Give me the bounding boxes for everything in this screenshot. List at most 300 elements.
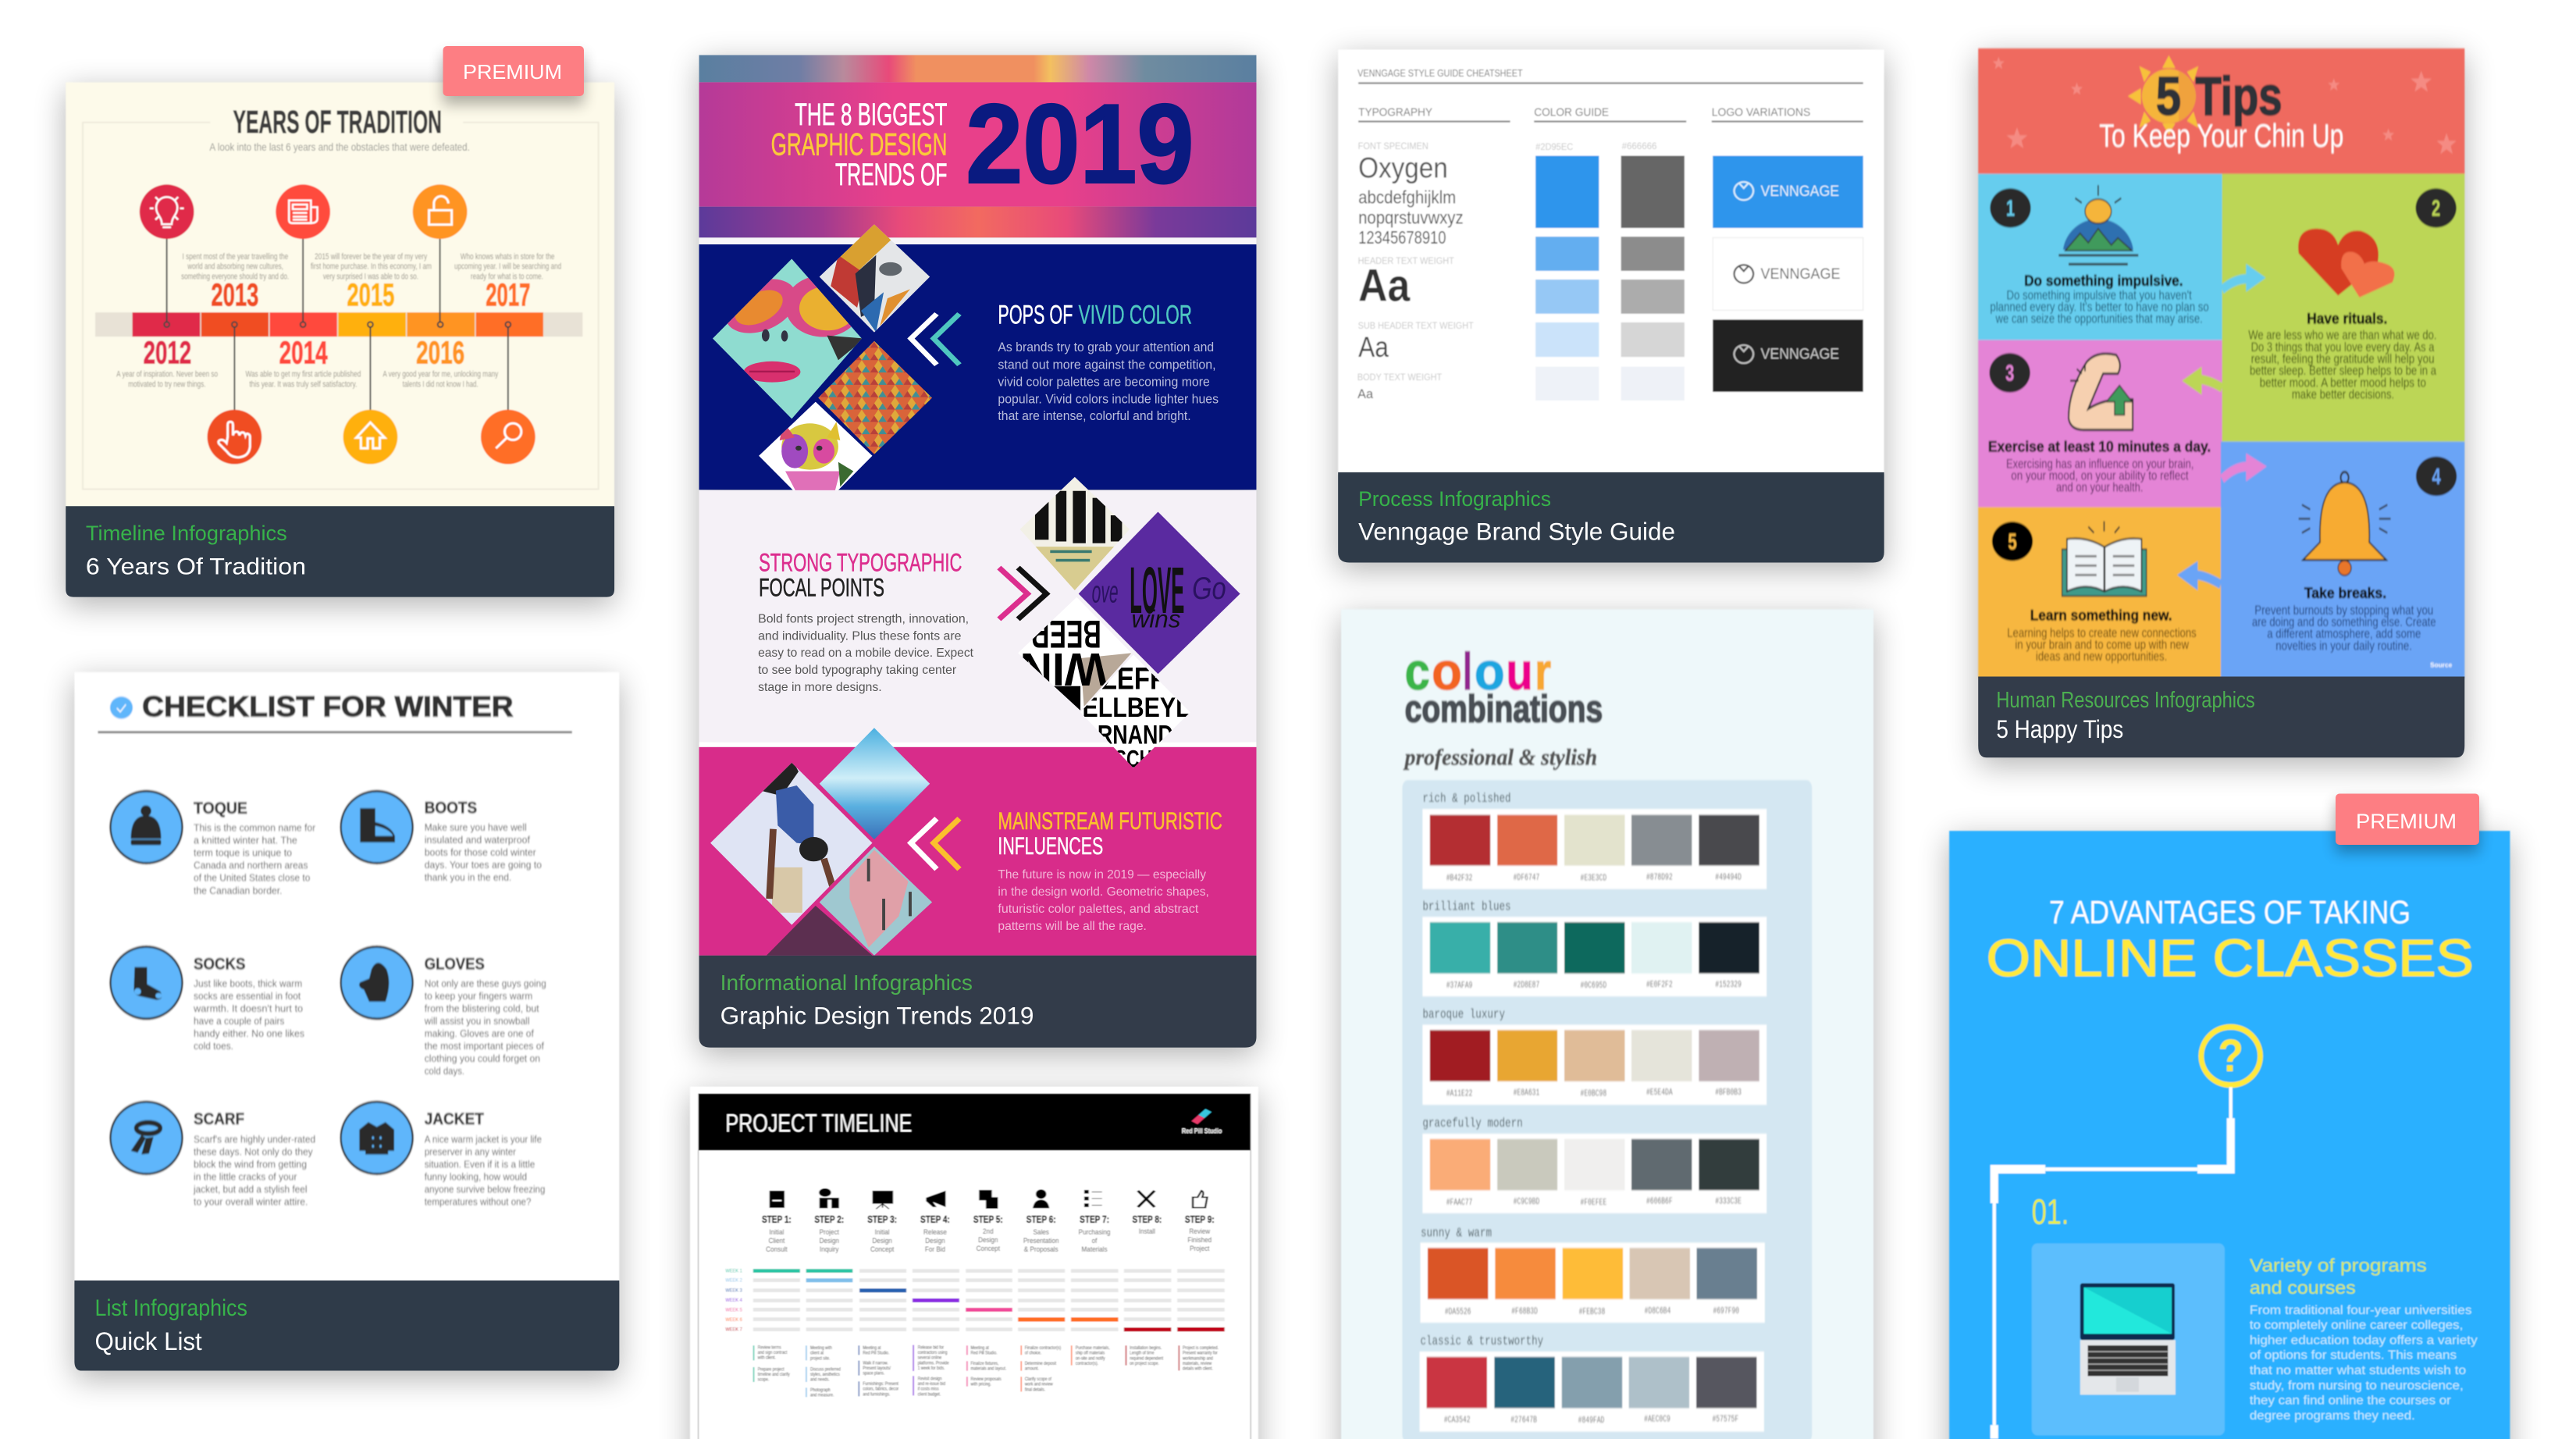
panel: project timeline card — [690, 1087, 1258, 1439]
step notes: materials and layout. — [971, 1366, 1007, 1372]
step notes: Revisit design — [918, 1377, 942, 1381]
item: jacket: A nice warm jacket is your life — [425, 1133, 542, 1145]
heading: combinations: combinations — [1405, 687, 1603, 730]
typography column: Aa — [1358, 260, 1411, 311]
palette: brilliant blues: #152329 — [1715, 980, 1742, 989]
photo: love wins lettering: Go — [1192, 571, 1226, 606]
week labels — [725, 1267, 742, 1332]
logo: dark: VENNGAGE — [1761, 346, 1839, 362]
icon: jacket — [341, 1102, 413, 1174]
subheading: To Keep Your Chin Up — [2099, 117, 2343, 154]
step notes: Project is completed. — [1183, 1346, 1219, 1351]
photo: love wins lettering: ove — [1092, 574, 1119, 609]
heading: Tips — [2195, 66, 2282, 126]
tip 5 text: in your brain and to come up with new — [2015, 637, 2190, 652]
heading: colour: r — [1535, 643, 1551, 701]
panel: Quick List checklist card — [74, 672, 619, 1371]
section body: stage in more designs. — [758, 680, 882, 694]
section body: that no matter what students wish to — [2250, 1363, 2466, 1377]
palette: classic & trustworthy: #CA3542 — [1444, 1415, 1471, 1425]
step descriptions: Design — [978, 1235, 998, 1244]
tip 3 text — [1988, 438, 2211, 494]
photo: black and white lettering: SCH — [1115, 745, 1152, 772]
logo: blue — [1713, 156, 1863, 228]
icon: question mark: ? — [2218, 1030, 2243, 1081]
step descriptions: Materials — [1082, 1245, 1108, 1253]
icon: scarf — [110, 1102, 183, 1174]
step notes: and furnishings. — [863, 1392, 891, 1397]
step notes: work and review — [1024, 1382, 1053, 1387]
step notes: client at — [810, 1351, 824, 1356]
photo: flipped lettering: WIN — [1020, 643, 1107, 694]
step descriptions: Design — [820, 1236, 839, 1245]
timeline captions: upcoming year. I will be searching and — [454, 262, 561, 271]
colour swatches — [1535, 141, 1685, 401]
badge: premium (timeline card): PREMIUM — [463, 60, 562, 84]
palette: brilliant blues: #37AFA9 — [1446, 981, 1472, 991]
typography column: FONT SPECIMEN — [1358, 141, 1429, 151]
tip 1 text: we can seize the opportunities that may arise. — [1995, 311, 2203, 326]
item: gloves: the most important pieces of — [425, 1040, 545, 1052]
item: socks: warmth. It doesn't hurt to — [193, 1003, 304, 1014]
step notes: and needs. — [810, 1377, 830, 1383]
typography column: abcdefghijklm — [1358, 187, 1456, 208]
step notes: project site. — [810, 1356, 831, 1361]
arrow: three to four — [2222, 454, 2267, 482]
subtitle: A look into the last 6 years and the obstacles that were defeated. — [209, 141, 470, 153]
palette: gracefully modern: #F0EFEE — [1581, 1198, 1606, 1207]
section heading — [759, 550, 962, 602]
section heading: POPS OF — [998, 301, 1073, 330]
step notes: and re-issue bid — [918, 1382, 945, 1387]
palette: classic & trustworthy: #AEC0C9 — [1644, 1414, 1670, 1424]
step descriptions: Concept — [977, 1244, 1000, 1252]
caption bar — [1338, 472, 1884, 562]
timeline captions: first home purchase. In this economy, I am — [311, 262, 432, 271]
palette: baroque luxury: #E8A631 — [1514, 1088, 1539, 1098]
section title: Variety of programs — [2250, 1256, 2427, 1276]
step notes: and sign contract — [758, 1351, 788, 1355]
caption bar: Informational Infographics — [720, 971, 973, 996]
item: jacket: anyone survive below freezing — [425, 1183, 545, 1195]
heading: colour — [1405, 643, 1551, 701]
thumbnail: five tips — [1978, 48, 2464, 678]
palette: gracefully modern: #333C3E — [1715, 1196, 1742, 1206]
heading text: THE 8 BIGGEST — [795, 98, 947, 132]
icon: flexed arm — [2069, 354, 2133, 430]
arrow: two to three — [2182, 367, 2222, 395]
week labels: WEEK 3 — [725, 1287, 742, 1293]
tip 2 text: better mood. A better mood helps to — [2260, 375, 2426, 390]
photo: pink and teal walls — [817, 845, 934, 956]
section heading: FOCAL POINTS — [759, 575, 884, 602]
icon: sock — [110, 946, 183, 1019]
step descriptions: For Bid — [925, 1245, 945, 1253]
step notes: Meeting with — [810, 1346, 832, 1351]
step headings: STEP 4: — [920, 1213, 950, 1225]
step notes: scope. — [758, 1377, 770, 1383]
step notes: Furnishings: Present — [863, 1382, 898, 1387]
item: boots: thank you in the end. — [425, 871, 511, 883]
palette: baroque luxury: #E5E4DA — [1646, 1088, 1673, 1098]
item: socks: cold toes. — [194, 1040, 233, 1052]
typography column: nopqrstuvwxyz — [1358, 208, 1464, 228]
step notes: platforms. Provide — [918, 1361, 949, 1366]
item: gloves: Not only are these guys going — [425, 978, 546, 989]
timeline captions: A very good year for me, unlocking many — [382, 370, 499, 379]
step notes: Review terms — [758, 1345, 781, 1350]
item: scarf — [193, 1110, 315, 1208]
step notes: with pricing. — [970, 1382, 991, 1387]
icon: hearts — [2298, 229, 2394, 297]
item: scarf: to your overall winter attire. — [194, 1195, 308, 1208]
chevrons — [911, 818, 959, 869]
thumbnail: style guide cheatsheet — [1338, 49, 1884, 475]
tip 2 text: We are less who we are than what we do. — [2248, 327, 2437, 342]
photo: letter JILL poster — [1019, 477, 1130, 590]
timeline captions: I spent most of the year travelling the — [183, 252, 288, 262]
caption bar: 6 Years Of Tradition — [86, 554, 306, 580]
logo: white: VENNGAGE — [1761, 266, 1840, 283]
palette: rich & polished: #49494D — [1715, 872, 1742, 882]
tip 2 text: Do 3 things that you love every day. As a — [2251, 340, 2435, 354]
icon: toque — [110, 791, 183, 864]
icon: check badge — [110, 696, 133, 719]
photo: triangle pattern — [818, 341, 932, 454]
item: toque: TOQUE — [194, 800, 247, 818]
section body — [758, 611, 973, 694]
number badges: 4 — [2432, 465, 2441, 490]
icon: question mark — [2201, 1027, 2261, 1085]
item: scarf: Scarf's are highly under-rated — [194, 1133, 315, 1145]
item: scarf: SCARF — [194, 1110, 244, 1129]
step notes: on-site and notify — [1076, 1356, 1105, 1361]
step headings: STEP 8: — [1132, 1213, 1162, 1225]
column headers: COLOR GUIDE — [1534, 107, 1609, 119]
caption bar: Graphic Design Trends 2019 — [720, 1002, 1034, 1029]
photo: black and white lettering: RNAND — [1098, 720, 1173, 750]
step descriptions: Design — [925, 1236, 945, 1245]
step notes: timeline and clarify — [758, 1373, 790, 1377]
typography column: 12345678910 — [1358, 228, 1446, 248]
section heading: MAINSTREAM FUTURISTIC — [998, 807, 1222, 834]
heading: years of tradition: YEARS OF TRADITION — [233, 104, 442, 140]
icon: light bulb — [140, 184, 194, 239]
step notes: space plans. — [863, 1371, 885, 1377]
tip 2 text: make better decisions. — [2292, 386, 2394, 401]
step notes: with client. — [757, 1355, 776, 1361]
step notes: if costs miss — [918, 1387, 939, 1392]
number badges: 3 — [2005, 361, 2014, 386]
item: scarf: jacket, but add a stylish feel — [193, 1183, 307, 1195]
section body: futuristic color palettes, and abstract — [998, 902, 1199, 916]
photo: black and white lettering: ZEFF — [1101, 661, 1165, 696]
item: boots: boots for those cold winter — [425, 846, 536, 858]
tip 5 text: ideas and new opportunities. — [2036, 649, 2167, 664]
palette: baroque luxury: #A11E22 — [1446, 1088, 1472, 1099]
section body: to completely online career colleges, — [2250, 1318, 2463, 1332]
badge: premium (online classes card): PREMIUM — [2356, 810, 2457, 833]
timeline captions: A year of inspiration. Never been so — [116, 370, 218, 379]
item: toque: Canada and northern areas — [194, 860, 308, 871]
item: toque: the Canadian border. — [194, 885, 282, 896]
panel: 5 Happy Tips card — [1978, 48, 2464, 757]
years: 2013 — [211, 276, 258, 312]
step notes: Purchase materials, — [1076, 1346, 1110, 1351]
tip 2 text: Have rituals. — [2307, 310, 2387, 327]
week labels: WEEK 1 — [725, 1267, 742, 1273]
number badges — [1990, 188, 2457, 561]
item: socks — [193, 955, 304, 1052]
palette: brilliant blues — [1422, 900, 1767, 996]
item: gloves: GLOVES — [425, 955, 485, 974]
item: gloves: making. Gloves are one of — [425, 1028, 535, 1039]
typography column: BODY TEXT WEIGHT — [1357, 372, 1443, 383]
section heading — [998, 807, 1222, 860]
section body: higher education today offers a variety — [2250, 1334, 2478, 1348]
icon: boot — [341, 791, 413, 864]
icon: sun over mountains — [2058, 185, 2138, 264]
palette: gracefully modern: #C9C9BD — [1514, 1197, 1539, 1207]
palette: gracefully modern: #FAAC77 — [1446, 1198, 1472, 1207]
years: 2016 — [416, 335, 464, 371]
typography column: SUB HEADER TEXT WEIGHT — [1358, 320, 1474, 331]
heading: colour: o — [1475, 643, 1505, 701]
step notes: client budget. — [918, 1392, 941, 1397]
thumbnail: years of tradition timeline — [66, 82, 614, 508]
palette: sunny & warm: #FEBC38 — [1579, 1307, 1605, 1317]
palette: rich & polished: #878D92 — [1646, 872, 1673, 882]
tip 4 text: Source — [2430, 661, 2452, 669]
heading: colour: o — [1432, 643, 1462, 701]
panel: Venngage Brand Style Guide card — [1338, 49, 1884, 562]
tip 1 text — [1990, 272, 2209, 326]
icon: open lock — [413, 184, 468, 239]
caption bar: Timeline Infographics — [86, 521, 287, 545]
gantt chart — [725, 1267, 1225, 1333]
item: gloves: to keep your fingers warm — [425, 990, 532, 1002]
section body: The future is now in 2019 — especially — [998, 867, 1207, 882]
palette: baroque luxury: baroque luxury — [1422, 1008, 1505, 1022]
item: scarf: block the wind from getting — [194, 1158, 307, 1170]
heading: colour: c — [1405, 643, 1430, 701]
section body: degree programs they need. — [2250, 1409, 2415, 1423]
caption bar: Quick List — [95, 1328, 202, 1356]
icon: sun — [2128, 55, 2198, 135]
step descriptions: & Proposals — [1024, 1245, 1059, 1253]
palette: sunny & warm: #F68B3D — [1511, 1306, 1538, 1316]
item: jacket: JACKET — [425, 1110, 484, 1129]
heading text: GRAPHIC DESIGN — [771, 128, 947, 162]
caption bar — [74, 1280, 619, 1371]
step notes: workmanship and — [1182, 1356, 1213, 1361]
item: toque: This is the common name for — [194, 822, 315, 834]
photo: black and white lettering: ELLBEYL — [1083, 692, 1190, 723]
step descriptions — [766, 1227, 1212, 1253]
connector path — [1994, 1087, 2231, 1439]
heading text — [771, 98, 947, 192]
logo: dark — [1713, 319, 1863, 392]
panel: online classes card — [1949, 831, 2510, 1439]
item: boots: BOOTS — [425, 799, 477, 817]
item: jacket: situation. Even if it is a little — [425, 1158, 535, 1170]
logo: blue: VENNGAGE — [1761, 183, 1839, 200]
years: 2014 — [279, 335, 328, 371]
timeline captions: 2015 will forever be the year of my very — [315, 252, 427, 262]
panel: 6 Years Of Tradition timeline card — [66, 82, 614, 597]
step notes: Installation begins. — [1130, 1346, 1162, 1351]
item: socks: Just like boots, thick warm — [194, 978, 302, 989]
column headers: LOGO VARIATIONS — [1712, 107, 1810, 119]
section body: they can find online the courses or — [2250, 1394, 2451, 1408]
step descriptions: Initial — [875, 1227, 890, 1236]
header band: Red Pill Studio — [1182, 1127, 1222, 1135]
section body: vivid color palettes are becoming more — [998, 374, 1210, 389]
section body: patterns will be all the rage. — [998, 918, 1147, 933]
thumbnail: checklist for winter — [74, 672, 619, 1284]
step notes: styles, aesthetics — [810, 1373, 840, 1377]
thumbnail: typographic and futuristic sections — [699, 473, 1256, 1048]
caption bar: List Infographics — [95, 1295, 247, 1321]
tip 1 text: Do something impulsive. — [2024, 272, 2183, 290]
step headings: STEP 1: — [762, 1213, 792, 1225]
step notes: Release bid for — [918, 1345, 944, 1350]
tip 4 text: novelties in your daily routine. — [2275, 638, 2412, 653]
years: 2015 — [347, 276, 394, 312]
timeline captions: talents I did not know I had. — [403, 380, 479, 390]
timeline bar — [95, 312, 582, 337]
step notes: Length of time — [1130, 1351, 1155, 1356]
step notes: and measure. — [810, 1393, 834, 1398]
item: toque: term toque is unique to — [194, 847, 292, 859]
item: boots — [425, 799, 542, 883]
section heading: STRONG TYPOGRAPHIC — [759, 550, 962, 577]
step icons — [770, 1188, 1207, 1209]
palette: brilliant blues: #E0F2F2 — [1646, 980, 1673, 989]
step descriptions: Design — [872, 1236, 892, 1245]
step notes: Photograph — [810, 1388, 831, 1393]
photo: sunglasses mural — [710, 255, 865, 422]
step descriptions: of — [1092, 1236, 1098, 1245]
photo: colourful cat — [759, 401, 873, 490]
column headers: TYPOGRAPHY — [1358, 107, 1432, 119]
heading: colour: l — [1463, 643, 1472, 701]
palette: sunny & warm: #697F90 — [1713, 1305, 1739, 1316]
palette: classic & trustworthy: classic & trustworthy — [1421, 1334, 1543, 1349]
palette: sunny & warm: sunny & warm — [1421, 1226, 1492, 1241]
caption bar — [66, 506, 614, 597]
item: gloves: will assist you in snowball — [424, 1015, 529, 1027]
step notes: Determine deposit — [1025, 1362, 1057, 1366]
timeline captions: world and absorbing new cultures, — [187, 262, 283, 271]
palette: brilliant blues: brilliant blues — [1422, 900, 1511, 914]
heading: 5 — [2156, 66, 2181, 126]
tip 1 text: planned every day. It's better to have no plan so — [1990, 299, 2209, 314]
badge: premium (timeline card) — [443, 46, 584, 96]
section body — [2250, 1303, 2478, 1423]
tip 4 text: are doing and do something else. Create — [2252, 614, 2436, 629]
column headers — [1358, 107, 1863, 123]
heading: CHECKLIST FOR WINTER — [142, 692, 514, 723]
caption bar: Process Infographics — [1358, 487, 1551, 511]
section title: and courses — [2250, 1277, 2356, 1298]
step notes: ship off materials — [1076, 1351, 1105, 1356]
step notes: contractor(s). — [1076, 1362, 1098, 1366]
step notes: Walk if narrow. — [863, 1361, 888, 1366]
step descriptions: Purchasing — [1079, 1227, 1110, 1236]
palette: rich & polished: #E3E3CD — [1581, 873, 1606, 883]
item: jacket: preserver in any winter — [425, 1145, 516, 1158]
heading — [2156, 66, 2282, 126]
item: boots: days. Your toes are going to — [425, 859, 542, 871]
week labels: WEEK 2 — [725, 1277, 742, 1283]
tip 2 text: result, feeling the gratitude will help you — [2251, 351, 2435, 365]
section body: stand out more against the competition, — [998, 357, 1216, 372]
palette: sunny & warm: #DA5526 — [1445, 1307, 1471, 1317]
palette: classic & trustworthy: #849FAD — [1578, 1416, 1604, 1425]
timeline captions: something everyone should try and do. — [181, 272, 289, 281]
subheading: professional & stylish — [1404, 744, 1597, 770]
photo: graffiti face — [820, 224, 930, 333]
tip 2 text: better sleep. Better sleep helps to be in a — [2250, 363, 2436, 377]
palette: sunny & warm — [1421, 1226, 1765, 1323]
palette: gracefully modern — [1422, 1117, 1767, 1213]
stars — [1993, 57, 2457, 154]
tip 3 text: Exercising has an influence on your brain, — [2006, 457, 2194, 471]
typography column — [1357, 141, 1474, 401]
item: gloves: clothing you could forget on — [425, 1053, 540, 1064]
palette: classic & trustworthy: #27647B — [1510, 1415, 1537, 1425]
caption bar — [699, 956, 1256, 1048]
icon: house — [343, 410, 397, 464]
icon: pointing hand — [208, 410, 262, 464]
item: jacket: funny looking, how would — [425, 1170, 527, 1183]
item: toque: a knitted winter hat. The — [194, 835, 297, 846]
step notes: of choice. — [1025, 1351, 1042, 1356]
tip 4 text: Prevent burnouts by stopping what you — [2254, 603, 2433, 617]
step notes — [753, 1345, 1219, 1398]
arrow: one to two — [2222, 264, 2266, 292]
photo: love wins lettering: wins — [1132, 605, 1181, 632]
section body: study, from nursing to neuroscience, — [2250, 1379, 2464, 1393]
cheatsheet header: VENNGAGE STYLE GUIDE CHEATSHEET — [1357, 68, 1523, 79]
photo: glitch blue — [820, 728, 930, 839]
step headings — [762, 1213, 1215, 1225]
section body: popular. Vivid colors include lighter hues — [998, 391, 1219, 406]
step notes: Clarify scope of — [1025, 1377, 1051, 1382]
colour swatches: #2D95EC — [1535, 141, 1574, 152]
section body: and individuality. Plus these fonts are — [758, 629, 961, 643]
item: gloves — [424, 955, 546, 1077]
tip 1 text: Do something impulsive that you haven't — [2006, 287, 2192, 302]
step headings: STEP 2: — [814, 1213, 844, 1225]
timeline captions: very surprised I was able to do so. — [323, 272, 418, 281]
item: toque: of the United States close to — [194, 872, 311, 884]
step notes: required dependent — [1130, 1356, 1164, 1361]
panel: colour combinations card — [1341, 609, 1873, 1439]
section heading: INFLUENCES — [998, 832, 1103, 860]
step descriptions: Finished — [1187, 1235, 1212, 1244]
step headings: STEP 7: — [1080, 1213, 1109, 1225]
item: gloves: from the blistering cold, but — [425, 1003, 539, 1014]
caption bar: Human Resources Infographics — [1996, 688, 2255, 713]
week labels: WEEK 5 — [725, 1306, 742, 1313]
week labels: WEEK 6 — [725, 1316, 742, 1323]
panel: palettes — [1402, 780, 1812, 1439]
section body: Bold fonts project strength, innovation, — [758, 611, 969, 625]
palette: gracefully modern: #606B6F — [1646, 1196, 1673, 1206]
palette: rich & polished: #DF6747 — [1514, 873, 1539, 883]
